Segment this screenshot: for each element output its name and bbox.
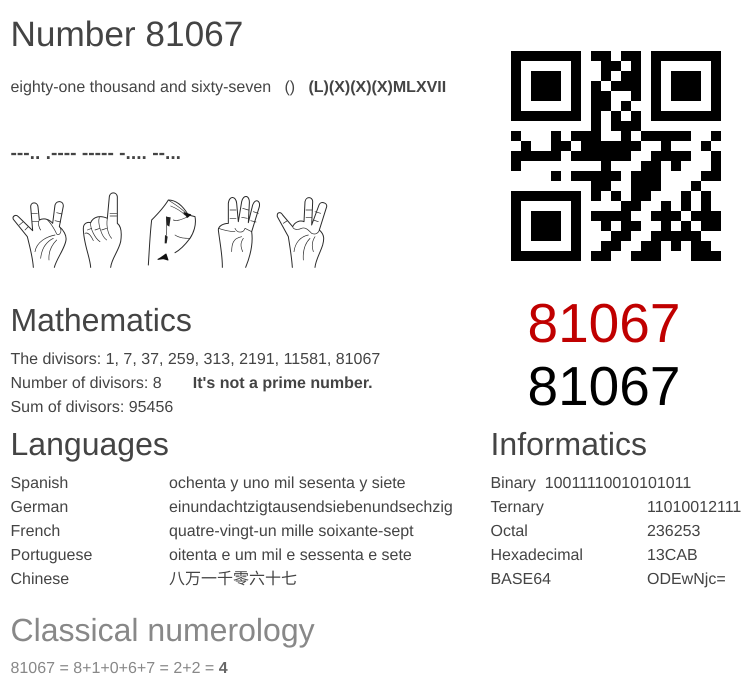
informatics table: Binary 10011110010101011: [490, 475, 691, 492]
heading: Languages: Languages: [10, 426, 169, 462]
languages table: oitenta e um mil e sessenta e sete: [169, 547, 412, 564]
morse code: ---.. .---- ----- -.... --...: [10, 143, 181, 164]
title: Number 81067: [10, 15, 243, 54]
large black number: 81067: [528, 355, 680, 417]
informatics table: 11010012111: [647, 499, 741, 516]
number in words and roman numeral: eighty-one thousand and sixty-seven () (L)(X)(X)(X)MLXVII: [10, 79, 446, 96]
informatics table: BASE64: [490, 571, 551, 588]
number of divisors and primality: Number of divisors: 8 It's not a prime number.: [10, 375, 373, 392]
languages table: ochenta y uno mil sesenta y siete: [169, 475, 406, 492]
languages table: quatre-vingt-un mille soixante-sept: [169, 523, 414, 540]
icon: hand digit 0: [148, 200, 195, 265]
divisors list: The divisors: 1, 7, 37, 259, 313, 2191, 11581, 81067: [10, 351, 380, 368]
sum of divisors: Sum of divisors: 95456: [10, 399, 173, 416]
icon: sign language hands: [12, 192, 328, 268]
languages table: 八万一千零六十七: [169, 571, 297, 588]
informatics table: Ternary: [490, 499, 544, 516]
languages table: Chinese: [10, 571, 69, 588]
languages table: Portuguese: [10, 547, 92, 564]
languages table: einundachtzigtausendsiebenundsechzig: [169, 499, 453, 516]
heading: Mathematics: Mathematics: [10, 302, 192, 338]
icon: hand digit 8: [13, 202, 66, 267]
large red number: 81067: [528, 292, 680, 354]
icon: hand digit 6: [218, 196, 260, 267]
languages table: French: [10, 523, 60, 540]
numerology calculation: 81067 = 8+1+0+6+7 = 2+2 = 4: [10, 660, 228, 677]
heading: Informatics: Informatics: [490, 426, 647, 462]
informatics table: ODEwNjc=: [647, 571, 726, 588]
QR code: [511, 51, 721, 261]
icon: hand digit 7: [277, 198, 327, 267]
languages table: Spanish: [10, 475, 68, 492]
languages table: German: [10, 499, 68, 516]
informatics table: Octal: [490, 523, 528, 540]
icon: hand digit 1: [83, 193, 121, 267]
informatics table: 13CAB: [647, 547, 698, 564]
heading: Classical numerology: Classical numerology: [10, 612, 315, 648]
informatics table: [490, 475, 741, 588]
informatics table: Hexadecimal: [490, 547, 583, 564]
languages table: [10, 475, 453, 588]
informatics table: 236253: [647, 523, 700, 540]
